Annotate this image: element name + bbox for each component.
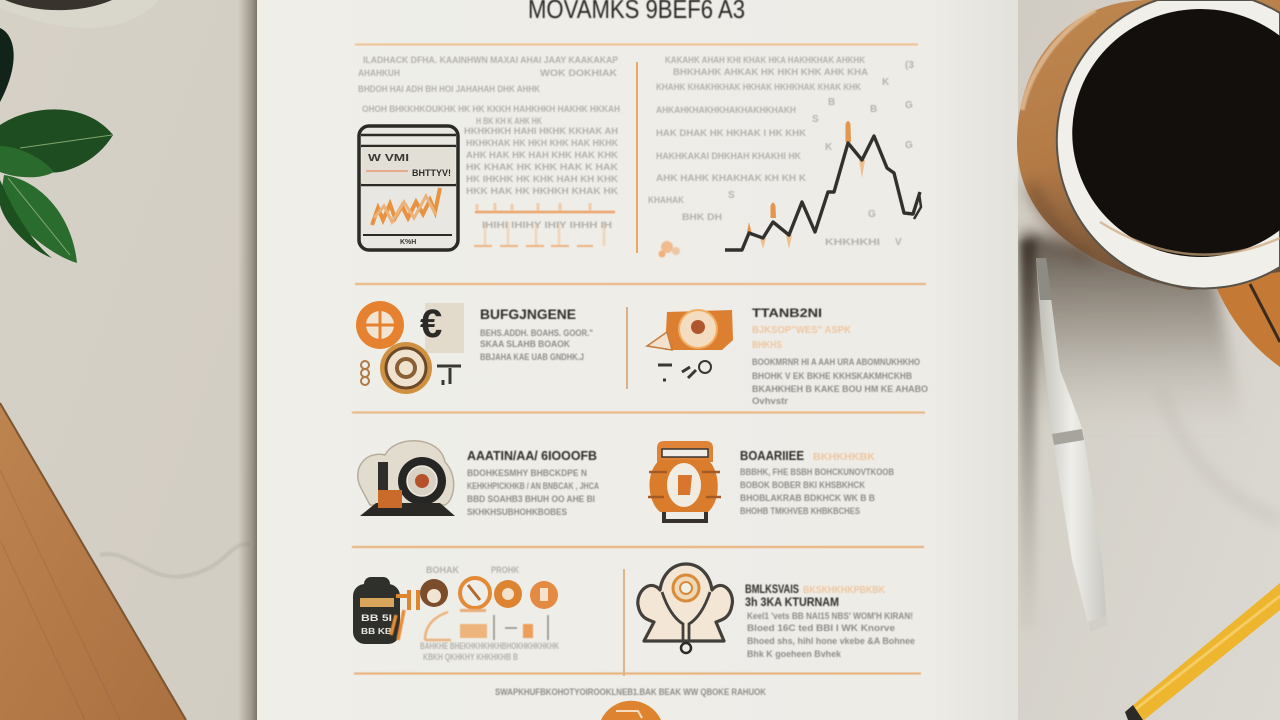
top right panel text: KHAHAK xyxy=(648,195,684,205)
top right panel text: KAKAHK AHAH KHI KHAK HKA HAKHKHAK AHKHK xyxy=(665,55,865,65)
small orange timeline chart: IHIHI IHIHY IHIY IHHH IH xyxy=(482,220,612,230)
body text: Bloed 16C ted BBI I WK Knorve xyxy=(747,623,895,634)
body text: BBD SOAHB3 BHUH OO AHE BI xyxy=(467,494,595,505)
section rules xyxy=(352,44,926,674)
top right panel text: AHK HAHK KHAKHAK KH KH K xyxy=(656,173,807,183)
body text xyxy=(480,328,593,363)
body text: BBBHK, FHE BSBH BOHCKUNOVTKOOB xyxy=(740,467,894,478)
top left panel text: HK IHKHK HK KHK HAH KH KHK xyxy=(466,174,619,184)
top right panel text xyxy=(648,55,880,247)
body text: SKHKHSUBHOHKBOBES xyxy=(467,507,567,518)
body text: BBJAHA KAE UAB GNDHK.J xyxy=(480,352,584,363)
pen xyxy=(1036,258,1107,632)
heading xyxy=(745,582,885,609)
body text: BDOHKESMHY BHBCKDPE N xyxy=(467,468,587,479)
block: transaction xyxy=(647,306,928,407)
scattered chart marks: G xyxy=(868,209,876,220)
coffee xyxy=(1072,9,1280,257)
heading: 3h 3KA KTURNAM xyxy=(745,595,839,609)
body text: SKAA SLAHB BOAOK xyxy=(480,339,570,350)
icon: coins: € xyxy=(420,302,442,346)
body text: BEHS.ADDH. BOAHS. GOOR." xyxy=(480,328,593,339)
body text: BHOHB TMKHVEB KHBKBCHES xyxy=(740,506,860,517)
top left panel text: AHK HAK HK HAH KHK HAK KHK xyxy=(466,150,619,160)
heading: AAATIN/AA/ 6IOOOFB xyxy=(467,448,597,463)
body text xyxy=(747,611,915,660)
top right panel text: BHKHAHK AHKAK HK HKH KHK AHK KHA xyxy=(673,67,869,77)
scattered chart marks: K xyxy=(825,142,833,153)
body text: BHOBLAKRAB BDKHCK WK B B xyxy=(740,493,875,504)
heading: BUFGJNGENE xyxy=(480,306,576,322)
body text: BOBOK BOBER BKI KHSBKHCK xyxy=(740,480,865,491)
heading: BOAARIIEE xyxy=(740,448,804,463)
caption text xyxy=(420,641,559,662)
mug handle xyxy=(1213,272,1280,367)
captions: BOHAK xyxy=(426,565,459,575)
sketch figures xyxy=(391,609,548,640)
caption text: BAHKHE BHEKHKHKHKHBHOKHKHKHKHK xyxy=(420,641,559,651)
orange coin row xyxy=(396,578,558,610)
top right panel text: KHKHKHI xyxy=(825,237,880,247)
top left panel text: BHDOH HAI ADH BH HOI JAHAHAH DHK AHHK xyxy=(358,84,540,94)
peak line chart xyxy=(725,121,921,250)
orange subheading: BJKSOP"WES" ASPK xyxy=(752,324,851,336)
top left panel text: HKHKHAK HK HKH KHK HAK HKHK xyxy=(466,138,618,148)
footer badge xyxy=(601,701,661,720)
body text xyxy=(467,468,599,518)
orange subheading xyxy=(752,324,851,351)
orange mini icon xyxy=(658,241,680,258)
yellow pencil xyxy=(1125,583,1280,720)
top right panel text: BHK DH xyxy=(682,212,722,222)
top right panel text: AHKAHKHAKHKHAKHAKHKHAKH xyxy=(656,105,796,115)
scattered chart marks: G xyxy=(905,100,913,111)
footer note: SWAPKHUFBKOHOTYOIROOKLNEB1.BAK BEAK WW QBOKE RAHUOK xyxy=(495,687,766,698)
body text: BHOHK V EK BKHE KKHSKAKMHCKHB xyxy=(752,371,912,382)
icon: coins xyxy=(356,301,464,394)
leaves xyxy=(0,28,113,263)
divider xyxy=(626,307,628,389)
paper sheet xyxy=(238,0,1018,720)
icon: jar xyxy=(648,441,721,521)
icon: dark bottle: BB KB xyxy=(361,627,392,636)
scattered chart marks: S xyxy=(728,190,735,201)
captions xyxy=(426,565,519,575)
block: analysis machine xyxy=(358,441,599,518)
body text: Bhoed shs, hihl hone vkebe &A Bohnee xyxy=(747,636,915,647)
top left panel text xyxy=(358,55,620,196)
plant pot xyxy=(0,0,158,28)
scattered chart marks: (3 xyxy=(905,60,914,71)
top left panel text: HK KHAK HK KHK HAK K HAK xyxy=(466,162,619,172)
scattered chart marks: V xyxy=(895,237,902,248)
block: infographic icons xyxy=(353,565,559,662)
block: savings jar xyxy=(648,441,894,521)
top left panel text: OHOH BHKKHKOUKHK HK HK KKKH HAHKHKH HAKHK HKKAH xyxy=(362,104,620,114)
mug body xyxy=(1017,0,1280,290)
top left panel text: HKHKHKH HAHI HKHK KKHAK AH xyxy=(464,126,618,136)
top left panel text: H BK KH K AHK HK xyxy=(476,116,542,126)
scattered chart marks xyxy=(728,60,914,248)
phone chart icon: W VMI xyxy=(368,153,409,164)
icon: dark bottle xyxy=(353,577,400,644)
top vertical divider xyxy=(636,62,638,253)
divider xyxy=(623,569,625,676)
caption text: KBKH QKHKHY KHKHKHB B xyxy=(423,652,518,662)
top left panel text: AHAHKUH xyxy=(358,68,400,78)
body text: Bhk K goeheen Bvhek xyxy=(747,649,842,660)
body text: Keel1 'vets BB NAI15 NBS' WOM'H KIRAN! xyxy=(747,611,913,622)
scattered chart marks: B xyxy=(870,104,877,115)
icon: orange ticket xyxy=(647,310,733,380)
body text: KEHKHPICKHKB / AN BNBCAK , JHCA xyxy=(467,481,599,492)
body text xyxy=(740,467,894,517)
scattered chart marks: G xyxy=(905,140,913,151)
top right panel text: HAK DHAK HK HKHAK I HK KHK xyxy=(656,128,807,138)
orange subheading: BKHKHKBK xyxy=(813,451,875,463)
top right panel text: HAKHKAKAI DHKHAH KHAKHI HK xyxy=(656,151,801,161)
body text: BOOKMRNR HI A AAH URA ABOMNUKHKHO xyxy=(752,357,920,368)
icon: machine xyxy=(358,441,455,516)
top left panel text: WOK DOKHIAK xyxy=(540,68,618,78)
body text xyxy=(752,357,928,407)
top right panel text: KHAHK KHAKHKHAK HKHAK HKHKHAK KHAK KHK xyxy=(656,82,861,92)
wooden board xyxy=(0,403,186,720)
mug xyxy=(1017,0,1280,367)
phone chart icon: K%H xyxy=(400,239,416,246)
scattered chart marks: B xyxy=(828,97,835,108)
top left panel text: ILADHACK DFHA. KAAINHWN MAXAI AHAI JAAY KAAKAKAP xyxy=(363,55,618,65)
body text: Ovhvstr xyxy=(752,396,788,407)
heading: BMLKSVAIS xyxy=(745,582,799,596)
block: budget coins xyxy=(356,301,593,394)
heading: BKSKHKHKPBKBK xyxy=(803,584,885,596)
phone chart icon xyxy=(359,126,458,250)
icon: dark bottle: BB 5I xyxy=(361,613,392,623)
heading: TTANB2NI xyxy=(752,306,822,320)
top left panel text: HKK HAK HK HKHKH KHAK HK xyxy=(466,186,619,196)
scattered chart marks: S xyxy=(812,114,819,125)
small orange timeline chart xyxy=(474,203,615,246)
phone chart icon: BHTTYV! xyxy=(412,168,451,178)
orange subheading: BHKHS xyxy=(752,339,782,351)
scattered chart marks: K xyxy=(882,77,890,88)
block: analysis xyxy=(638,564,915,660)
captions: PROHK xyxy=(491,565,519,575)
mug rim xyxy=(1057,0,1280,288)
icon: bell trefoil xyxy=(638,564,732,653)
body text: BKAHKHEH B KAKE BOU HM KE AHABO xyxy=(752,384,928,395)
